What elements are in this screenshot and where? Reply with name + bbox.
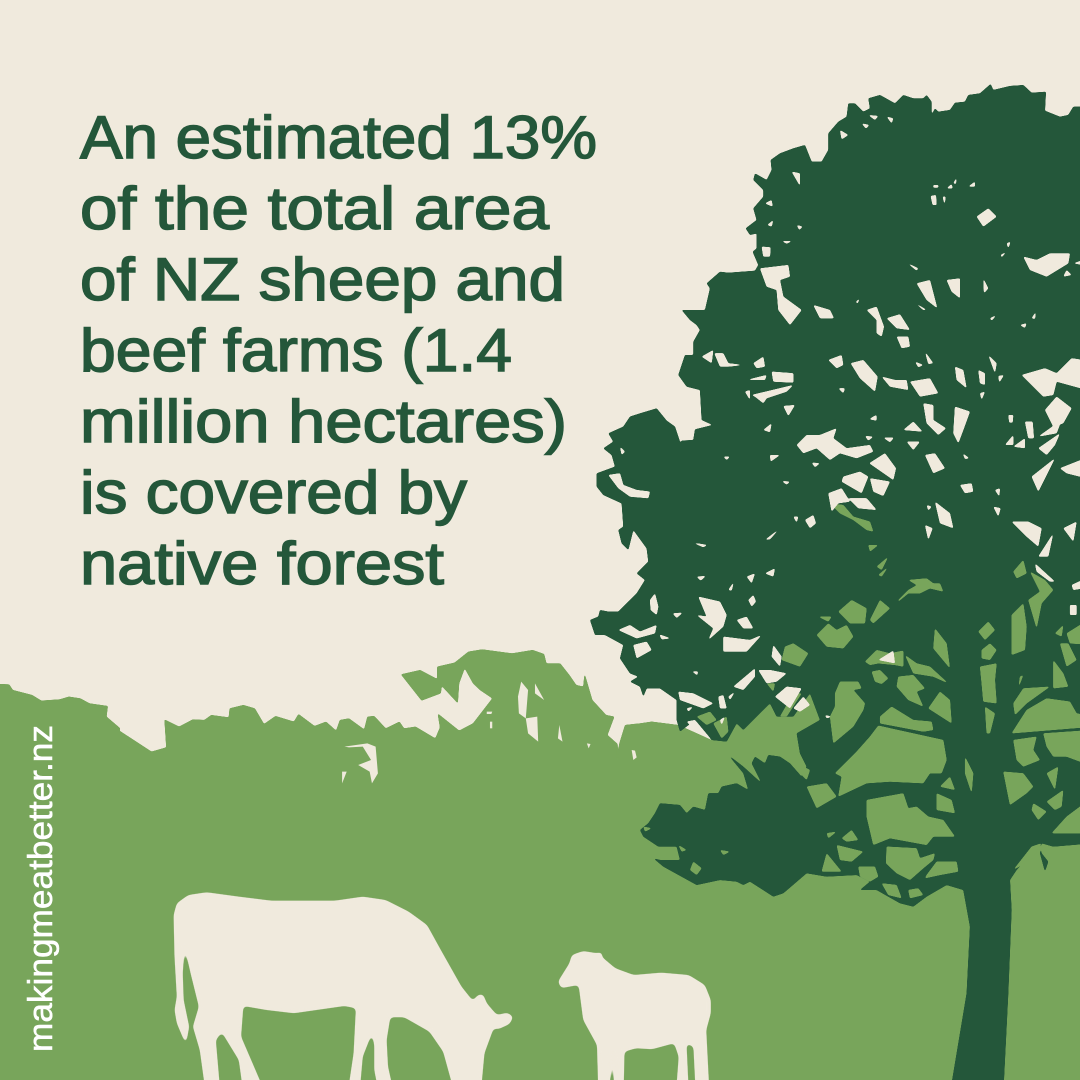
title: native forest statement: million hectares) bbox=[80, 388, 567, 455]
green hill with distant treeline bbox=[0, 649, 1080, 1080]
website label: makingmeatbetter.nz bbox=[22, 725, 60, 1052]
title: native forest statement: native forest bbox=[80, 530, 444, 597]
sky gaps in upper canopy bbox=[608, 115, 1080, 557]
tree canopy and trunk shape bbox=[590, 84, 1080, 1080]
title: native forest statement: of NZ sheep and bbox=[80, 246, 565, 313]
title: native forest statement bbox=[80, 104, 597, 597]
sky gaps in lower canopy bbox=[618, 563, 1080, 740]
title: native forest statement: An estimated 13% bbox=[80, 104, 597, 171]
title: native forest statement: beef farms (1.4 bbox=[80, 317, 512, 384]
title: native forest statement: of the total area bbox=[80, 175, 550, 242]
green gaps between branches bbox=[643, 503, 1080, 898]
tree silhouette bbox=[590, 84, 1080, 1080]
title: native forest statement: is covered by bbox=[80, 459, 467, 526]
icon: sheep bbox=[558, 951, 711, 1080]
icon: grazing cow bbox=[174, 892, 513, 1080]
